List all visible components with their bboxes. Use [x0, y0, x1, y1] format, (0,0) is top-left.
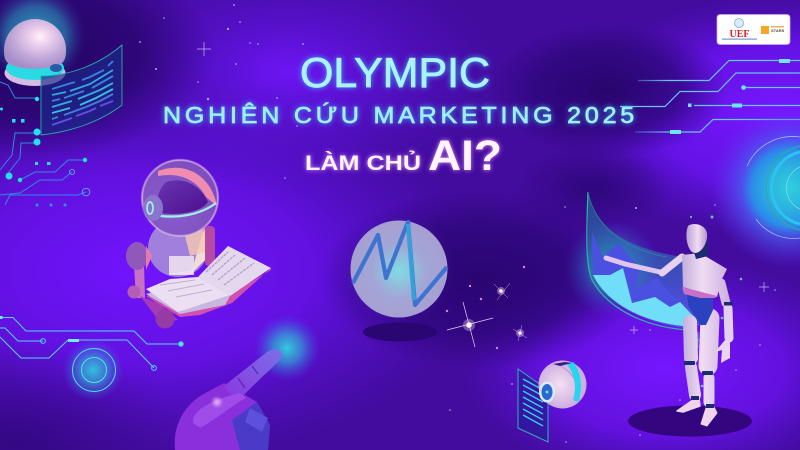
dome glow [0, 0, 86, 86]
eye robot with data panel [518, 360, 586, 442]
tech circle target [710, 108, 800, 268]
stars badge [761, 26, 769, 34]
dome sphere [4, 19, 66, 69]
logo badge: UEF [730, 29, 750, 40]
logo badge [717, 14, 790, 44]
star field [139, 4, 776, 443]
pelvis [687, 291, 713, 325]
pointing robotic hand [175, 315, 320, 450]
legs [690, 322, 691, 358]
neck and head [694, 240, 708, 259]
glow [564, 220, 660, 316]
left orb with rings [62, 339, 124, 401]
circuit lines: left [0, 82, 90, 206]
chart screen [588, 192, 700, 328]
torso [682, 253, 727, 297]
sparkling stars [446, 266, 527, 349]
title line 3: AI? [428, 132, 502, 180]
hologram screen [41, 45, 122, 135]
title line 3: LÀM CHỦ [305, 151, 421, 175]
dome robot with hologram [0, 0, 122, 135]
dome base [4, 60, 66, 86]
circuit lines: top right [620, 59, 800, 134]
UEF emblem [734, 18, 744, 28]
astronaut robot reading book [126, 160, 271, 328]
eye sphere [538, 360, 586, 408]
title line 3 [305, 132, 502, 180]
center logo orb [343, 213, 455, 342]
humanoid robot with chart screen [564, 192, 752, 436]
circuit lines: bottom left [0, 316, 183, 370]
helmet [142, 160, 218, 236]
arms [205, 226, 215, 266]
title line 1: OLYMPIC [300, 49, 490, 96]
floor shadow [628, 406, 752, 436]
logo badge: STARS [771, 28, 785, 33]
open book [146, 268, 271, 317]
title line 2: NGHIÊN CỨU MARKETING 2025 [163, 102, 638, 128]
title [163, 49, 638, 180]
code lines [52, 61, 113, 125]
orb shadow [363, 322, 437, 342]
body [148, 219, 208, 277]
robot arm [606, 258, 660, 272]
right arm [721, 283, 726, 303]
data panel [518, 369, 548, 442]
sparkles [197, 42, 769, 348]
